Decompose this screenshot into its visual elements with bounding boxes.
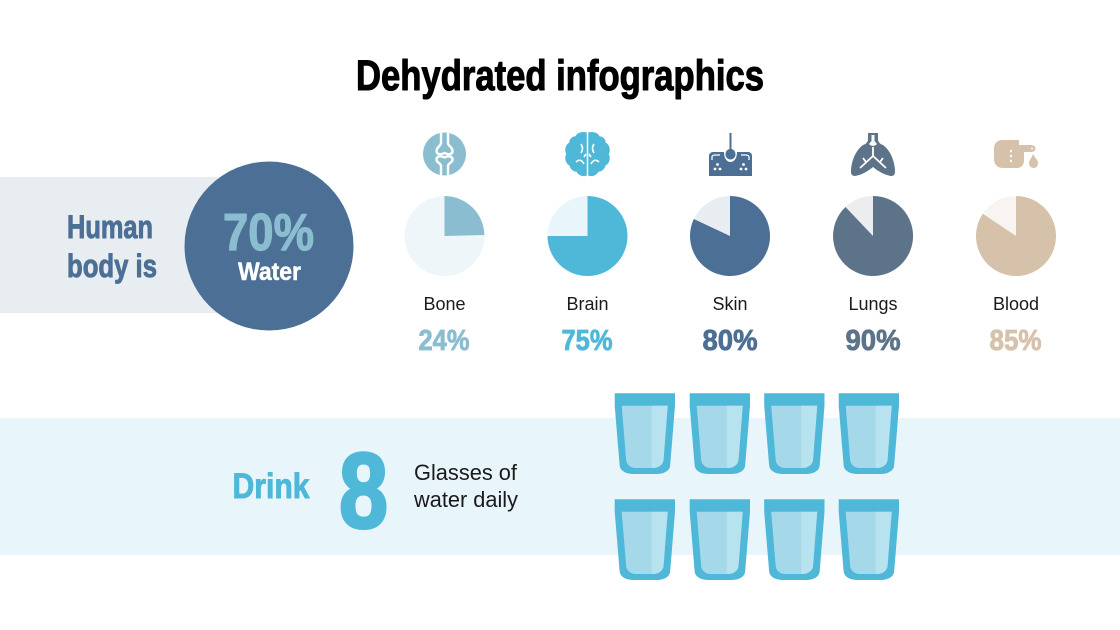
pie chart: skin 80%: [690, 196, 770, 276]
label: blood: Blood: [993, 294, 1039, 314]
value: 90%: 90%: [846, 325, 901, 357]
panel: lungs: [833, 133, 913, 357]
value: 80%: 80%: [702, 325, 758, 357]
label: brain: Brain: [566, 294, 609, 314]
panel: bone: [404, 132, 484, 357]
panel: brain: [548, 133, 628, 357]
icon: brain: [566, 133, 609, 175]
text: glasses of water daily: water daily: [413, 487, 518, 512]
heading: drink: Drink: [232, 467, 310, 506]
band: left background: [0, 177, 240, 313]
heading: human body is: Human: [67, 209, 153, 245]
circle: 70% water: Water: [238, 258, 301, 286]
value: 75%: 75%: [562, 325, 613, 357]
pie chart: blood 85%: [976, 196, 1056, 276]
icons: eight glasses of water: [615, 393, 899, 580]
heading: human body is: [67, 209, 157, 284]
circle: 70% water: 70%: [223, 204, 314, 262]
circle: 70% water: [184, 162, 354, 330]
label: lungs: Lungs: [848, 294, 898, 314]
label: bone: Bone: [423, 294, 466, 314]
text: glasses of water daily: [413, 460, 518, 512]
panel: human body water share: [0, 162, 354, 330]
text: glasses of water daily: Glasses of: [414, 460, 518, 485]
label: skin: Skin: [712, 294, 748, 314]
pie chart: bone 24%: [404, 196, 484, 276]
icon: bone joint: [423, 132, 466, 176]
pie chart: lungs 90%: [833, 196, 913, 276]
icon: lungs: [851, 133, 895, 176]
heading: human body is: body is: [67, 248, 157, 284]
icon: finger with blood drop: [994, 140, 1038, 168]
panel: blood: [976, 140, 1056, 357]
title: Dehydrated infographics: [356, 52, 764, 100]
band: drink background: [0, 418, 1120, 555]
icon: skin and hair follicle: [709, 133, 752, 176]
panel: skin: [690, 133, 770, 357]
value: 24%: 24%: [418, 325, 470, 357]
value: 85%: 85%: [990, 325, 1042, 357]
number: 8: 8: [339, 430, 388, 550]
pie chart: brain 75%: [548, 196, 628, 276]
panel: daily water intake: [0, 393, 1120, 580]
